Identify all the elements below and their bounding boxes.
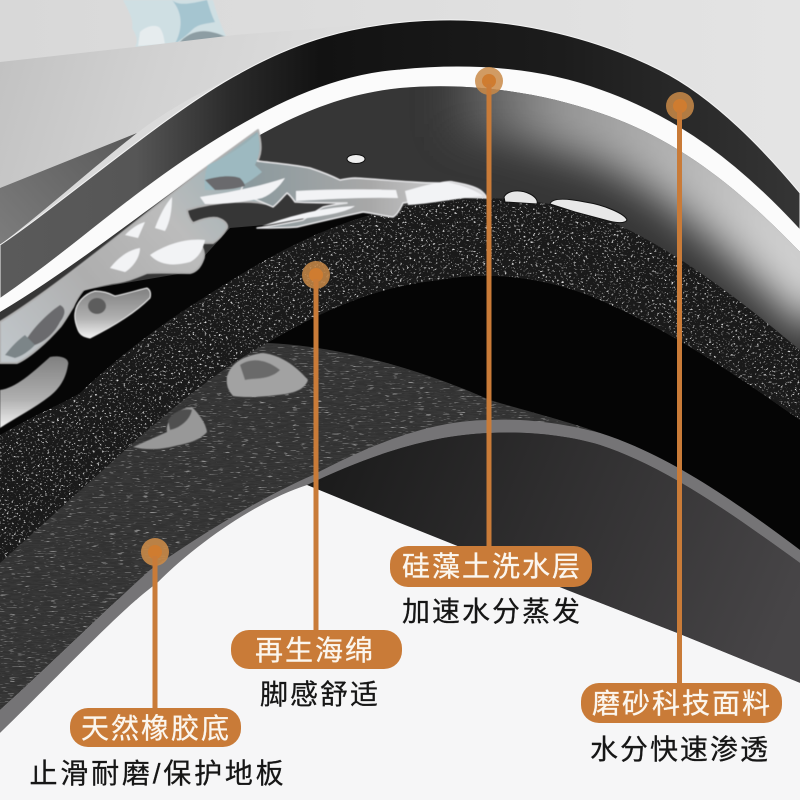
- water: droplet on foam left: [75, 288, 151, 338]
- water: main mass penetrating the fabric: [0, 130, 487, 363]
- water: long bead on foam: [550, 199, 627, 223]
- water: small droplet on the sole: [133, 407, 207, 449]
- layer: rubber sole texture: [0, 340, 610, 720]
- layer: white diatomite band: [0, 67, 800, 312]
- callout: 磨砂科技面料: 磨砂科技面料: [592, 688, 772, 719]
- callout: 天然橡胶底: 止滑耐磨/保护地板: [30, 758, 286, 789]
- layer: upper fabric band: [0, 20, 800, 300]
- shaded underside of the sheet: [0, 133, 137, 245]
- callout: 天然橡胶底: [30, 708, 286, 789]
- water: small bead in the cavity: [347, 154, 365, 164]
- layer: dark shoe underside: [307, 433, 800, 683]
- callout: 再生海绵: 再生海绵: [255, 635, 375, 666]
- water: upper ridge: [240, 160, 487, 228]
- white lower background: [0, 485, 800, 800]
- callout: 磨砂科技面料: 水分快速渗透: [590, 734, 770, 765]
- water: droplet on the sole: [227, 353, 308, 397]
- callout: 硅藻土洗水层: 加速水分蒸发: [402, 596, 582, 627]
- water: left mass: [0, 130, 270, 363]
- water: blue tinted top: [205, 133, 262, 190]
- callout: 硅藻土洗水层: 硅藻土洗水层: [402, 551, 582, 582]
- icon: water splash on top of the upper sheet: [123, 0, 227, 47]
- water: bright highlights: [110, 178, 483, 272]
- leader line: 磨砂科技面料: [666, 92, 694, 685]
- callout: 硅藻土洗水层: [390, 546, 592, 627]
- callout: 天然橡胶底: 天然橡胶底: [81, 713, 231, 744]
- leader line: 再生海绵: [302, 261, 330, 632]
- interior cavity: [0, 60, 800, 600]
- layer: black arch under foam: [267, 276, 800, 550]
- leader line: 天然橡胶底: [141, 538, 169, 710]
- layer: recycled sponge foam: [0, 190, 800, 570]
- water: dark pockets: [25, 176, 245, 345]
- callout: 磨砂科技面料: [581, 683, 782, 765]
- callout: 再生海绵: [231, 630, 402, 710]
- top sheet surface: [0, 22, 400, 188]
- leader line: 硅藻土洗水层: [475, 67, 503, 548]
- callout: 再生海绵: 脚感舒适: [260, 679, 380, 710]
- water: droplet bottom left: [0, 356, 68, 428]
- water: bead on foam: [504, 191, 537, 204]
- layer: sole grey edge strip: [0, 420, 800, 733]
